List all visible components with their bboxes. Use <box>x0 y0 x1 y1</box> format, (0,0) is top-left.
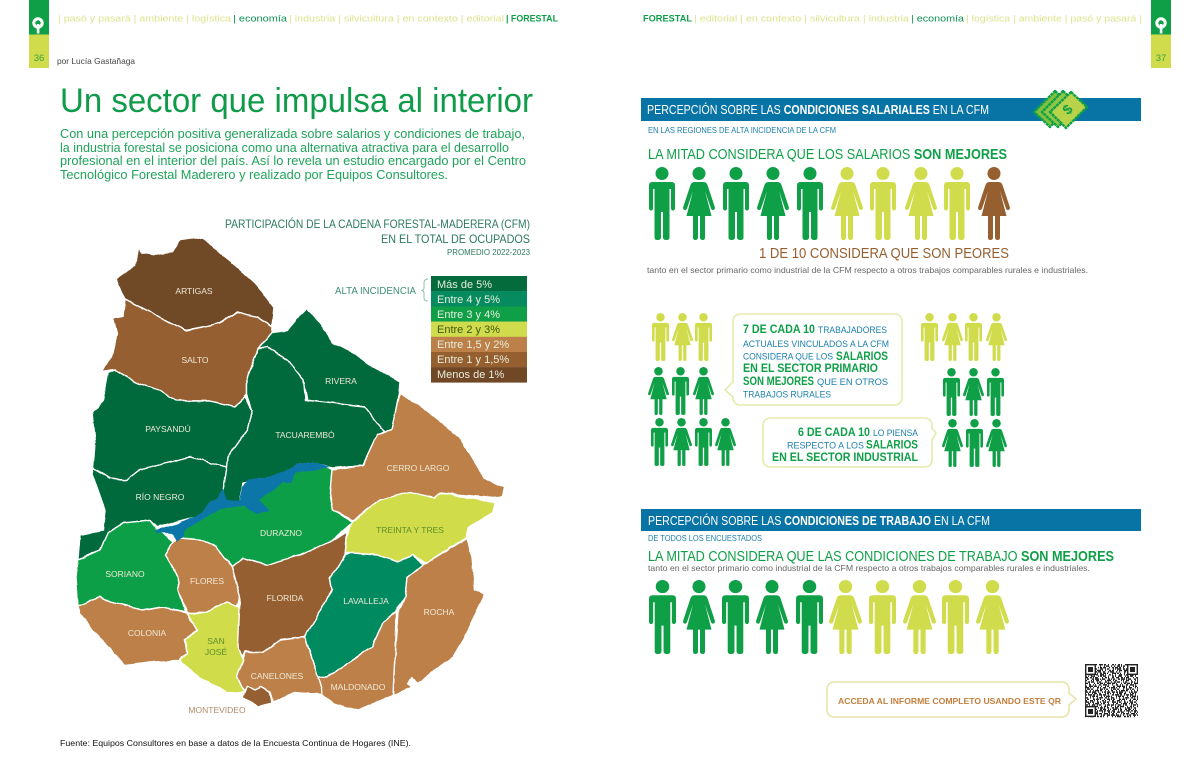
callout: 7 de cada 10: TRABAJADORES <box>818 325 887 336</box>
map labels: LAVALLEJA <box>343 596 389 606</box>
map labels: DURAZNO <box>260 528 302 538</box>
Rio Negro lake <box>156 462 330 542</box>
map labels: FLORES <box>190 576 224 586</box>
callout: 6 de cada 10: LO PIENSA <box>873 428 919 439</box>
section bar: condiciones salariales: PERCEPCIÓN SOBRE LAS CONDICIONES SALARIALES EN LA CFM <box>647 102 989 117</box>
department: Maldonado <box>318 612 396 710</box>
department: Rocha <box>393 538 485 695</box>
pictogram: right group 10 people <box>921 313 1007 467</box>
department: Montevideo <box>242 686 272 707</box>
callout: 6 de cada 10 <box>763 418 936 467</box>
map heading: EN EL TOTAL DE OCUPADOS <box>381 232 530 246</box>
intro paragraph: Tecnológico Forestal Maderero y realizado por Equipos Consultores. <box>60 168 448 182</box>
map labels: RÍO NEGRO <box>136 492 185 502</box>
right section navigation <box>643 14 1142 24</box>
map labels <box>105 286 455 715</box>
map labels: FLORIDA <box>267 593 304 603</box>
map labels: SORIANO <box>105 569 145 579</box>
department: Tacuarembó <box>223 347 385 505</box>
icon: money bills: $ <box>1059 101 1076 118</box>
map of Uruguay by department <box>76 237 505 710</box>
intro paragraph: Con una percepción positiva generalizada sobre salarios y condiciones de trabajo, <box>60 127 525 141</box>
brace <box>422 279 428 301</box>
section bar: condiciones salariales <box>641 98 1141 121</box>
icon: money bills <box>1034 91 1087 128</box>
map labels: TACUAREMBÓ <box>275 430 335 440</box>
callout: 7 de cada 10: EN EL SECTOR PRIMARIO <box>743 361 878 375</box>
left section navigation: | economía <box>233 14 288 24</box>
left section navigation: | FORESTAL <box>506 14 558 24</box>
subheading: regiones alta incidencia: EN LAS REGIONES DE ALTA INCIDENCIA DE LA CFM <box>648 126 836 135</box>
department: Artigas <box>115 237 274 330</box>
department: Durazno <box>173 463 353 567</box>
legend: Más de 5% <box>437 279 492 291</box>
map heading: PROMEDIO 2022-2023 <box>447 247 530 257</box>
intro paragraph: la industria forestal se posiciona como una alternativa atractiva para el desarrollo <box>60 141 509 155</box>
map labels: CANELONES <box>251 671 304 681</box>
callout: 7 de cada 10: QUE EN OTROS <box>817 377 888 388</box>
left page tab <box>29 0 49 68</box>
callout: 7 de cada 10 <box>725 314 902 405</box>
page number 36: 36 <box>34 53 44 64</box>
department: Lavalleja <box>305 553 423 677</box>
callout: 7 de cada 10: 7 DE CADA 10 <box>743 322 815 336</box>
map heading: PARTICIPACIÓN DE LA CADENA FORESTAL-MADERERA (CFM) <box>225 216 530 231</box>
map labels: ARTIGAS <box>175 286 213 296</box>
callout: QR: ACCEDA AL INFORME COMPLETO USANDO ESTE QR <box>838 696 1061 706</box>
legend: Entre 3 y 4% <box>437 309 500 321</box>
note: salaries: tanto en el sector primario como industrial de la CFM respecto a otros trabajos comparables rurales e industriales. <box>647 265 1088 275</box>
map labels: RIVERA <box>325 376 357 386</box>
department: Paysandú <box>92 370 252 480</box>
map labels: MONTEVIDEO <box>188 705 246 715</box>
headline: 1 de 10 peores: 1 DE 10 CONSIDERA QUE SON PEORES <box>759 245 1009 262</box>
department: San José <box>180 602 245 693</box>
intro paragraph: profesional en el interior del país. Así lo revela un estudio encargado por el Centro <box>60 154 526 168</box>
department: Salto <box>102 299 272 407</box>
left section navigation <box>58 14 558 24</box>
callout: 6 de cada 10: SALARIOS <box>866 438 918 452</box>
department: Cerro Largo <box>330 392 505 520</box>
map labels: SALTO <box>181 355 209 365</box>
title: Un sector que impulsa al interior <box>60 82 533 120</box>
left section navigation: | pasó y pasará | ambiente | logística <box>58 14 232 24</box>
headline: la mitad salarios: LA MITAD CONSIDERA QUE LOS SALARIOS SON MEJORES <box>648 146 1007 163</box>
note: work conditions: tanto en el sector primario como industrial de la CFM respecto a otros trabajos comparables rurales e industriales. <box>648 563 1090 573</box>
pictogram: left group 10 people <box>648 313 736 466</box>
QR code <box>1085 664 1138 717</box>
right page tab <box>1151 0 1171 68</box>
callout: 6 de cada 10: EN EL SECTOR INDUSTRIAL <box>772 450 918 464</box>
map labels: TREINTA Y TRES <box>376 525 444 535</box>
intro paragraph <box>60 127 526 182</box>
right section navigation: | editorial | en contexto | silvicultura | industria <box>694 14 910 24</box>
callout: QR <box>827 682 1076 717</box>
legend: Menos de 1% <box>437 369 504 381</box>
byline: por Lucía Gastañaga <box>57 56 135 66</box>
icon: tree <box>1157 19 1165 34</box>
left section navigation: | industria | silvicultura | en contexto | editorial <box>289 14 504 24</box>
map labels: MALDONADO <box>331 682 386 692</box>
legend: Entre 4 y 5% <box>437 294 500 306</box>
callout: 6 de cada 10: RESPECTO A LOS <box>787 440 864 452</box>
legend: Entre 1 y 1,5% <box>437 354 509 366</box>
map labels: CERRO LARGO <box>387 463 450 473</box>
department: Canelones <box>237 637 323 702</box>
callout: 6 de cada 10: 6 DE CADA 10 <box>798 425 870 439</box>
legend label: alta incidencia <box>335 279 428 301</box>
legend: Entre 2 y 3% <box>437 324 500 336</box>
right section navigation: | economía <box>911 14 965 24</box>
source note: Fuente: Equipos Consultores en base a datos de la Encuesta Continua de Hogares (INE). <box>60 738 411 748</box>
callout: 7 de cada 10: CONSIDERA QUE LOS <box>743 352 833 362</box>
map labels: PAYSANDÚ <box>145 424 191 434</box>
map labels: JOSÉ <box>205 647 227 657</box>
pictogram: salaries 10 people <box>649 167 1010 240</box>
callout: 7 de cada 10: SALARIOS <box>836 349 888 363</box>
department: Soriano <box>76 520 185 612</box>
section bar: condiciones de trabajo <box>641 509 1141 531</box>
pictogram: work conditions 10 people <box>649 580 1009 654</box>
department: Río Negro <box>78 457 227 560</box>
map labels: COLONIA <box>128 628 166 638</box>
department: Treinta y Tres <box>345 492 495 563</box>
legend: Entre 1,5 y 2% <box>437 339 509 351</box>
callout: 7 de cada 10: ACTUALES VINCULADOS A LA CFM <box>743 339 889 350</box>
map labels: ROCHA <box>424 607 455 617</box>
legend <box>431 276 527 383</box>
callout: 7 de cada 10: SON MEJORES <box>743 374 814 388</box>
right section navigation: | logística | ambiente | pasó y pasará | <box>966 14 1142 24</box>
subheading: todos los encuestados: DE TODOS LOS ENCUESTADOS <box>648 534 762 543</box>
map labels: SAN <box>207 636 225 646</box>
right section navigation: FORESTAL <box>643 14 692 24</box>
headline: la mitad condiciones: LA MITAD CONSIDERA QUE LAS CONDICIONES DE TRABAJO SON MEJORES <box>648 548 1114 565</box>
department: Rivera <box>258 308 400 432</box>
callout: 7 de cada 10: TRABAJOS RURALES <box>743 390 831 400</box>
department: Flores <box>165 538 240 613</box>
department: Colonia <box>78 597 197 665</box>
legend label: alta incidencia: ALTA INCIDENCIA <box>335 286 416 297</box>
page number 37: 37 <box>1156 53 1166 64</box>
department: Florida <box>232 532 347 657</box>
map heading <box>225 216 530 257</box>
section bar: condiciones de trabajo: PERCEPCIÓN SOBRE LAS CONDICIONES DE TRABAJO EN LA CFM <box>648 513 990 528</box>
icon: tree <box>34 19 42 34</box>
